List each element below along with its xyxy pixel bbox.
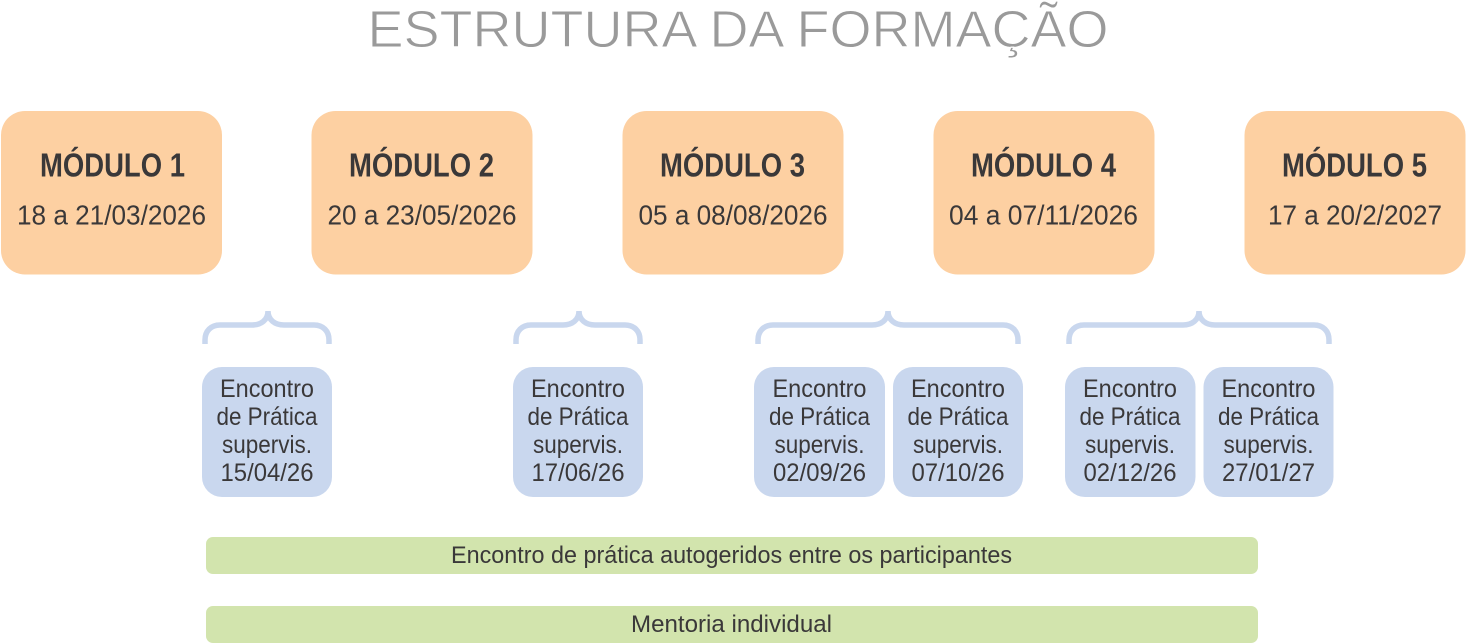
panel: encontro 02/12/26: supervis. <box>1085 431 1175 459</box>
panel: encontro 27/01/27: Encontro <box>1222 375 1316 403</box>
panel: módulo 3 <box>622 111 844 274</box>
panel: módulo 2: 20 a 23/05/2026 <box>328 200 516 230</box>
panel: módulo 5: MÓDULO 5 <box>1282 146 1427 184</box>
panel: encontro 02/12/26: 02/12/26 <box>1084 459 1176 487</box>
brace: after módulo 4 <box>1069 311 1329 344</box>
panel: encontro 27/01/27: supervis. <box>1224 431 1314 459</box>
panel: encontro 15/04/26: supervis. <box>222 431 312 459</box>
panel: módulo 4 <box>934 111 1154 274</box>
brace: after módulo 3 <box>758 311 1018 344</box>
panel: módulo 5 <box>1244 111 1466 274</box>
panel: encontro 27/01/27: 27/01/27 <box>1222 459 1315 487</box>
panel: módulo 1 <box>1 111 222 274</box>
bar: mentoria individual <box>206 606 1258 643</box>
panel: módulo 1: 18 a 21/03/2026 <box>17 200 206 230</box>
panel: encontro 27/01/27 <box>1204 367 1334 497</box>
panel: módulo 2 <box>312 111 532 274</box>
panel: encontro 02/09/26 <box>754 367 885 497</box>
panel: encontro 02/12/26 <box>1065 367 1196 497</box>
panel: encontro 17/06/26 <box>513 367 643 497</box>
brace: after módulo 2 <box>516 311 640 344</box>
panel: módulo 4: MÓDULO 4 <box>971 146 1117 184</box>
panel: encontro 17/06/26: 17/06/26 <box>532 459 624 487</box>
panel: módulo 5: 17 a 20/2/2027 <box>1268 200 1442 230</box>
bar: mentoria individual: Mentoria individual <box>631 611 832 638</box>
panel: encontro 17/06/26: supervis. <box>533 431 623 459</box>
panel: encontro 17/06/26: Encontro <box>531 375 625 403</box>
panel: encontro 15/04/26: 15/04/26 <box>220 459 314 487</box>
panel: módulo 2: MÓDULO 2 <box>349 146 494 184</box>
panel: módulo 4: 04 a 07/11/2026 <box>949 200 1138 230</box>
panel: encontro 27/01/27: de Prática <box>1218 403 1319 431</box>
panel: encontro 07/10/26: supervis. <box>913 431 1003 459</box>
bar: encontros autogeridos <box>206 537 1258 574</box>
panel: encontro 02/12/26: Encontro <box>1083 375 1177 403</box>
panel: encontro 15/04/26: Encontro <box>220 375 314 403</box>
brace: after módulo 1 <box>205 311 329 344</box>
panel: encontro 07/10/26: de Prática <box>908 403 1009 431</box>
panel: encontro 15/04/26 <box>202 367 332 497</box>
panel: módulo 3: MÓDULO 3 <box>660 146 805 184</box>
panel: encontro 15/04/26: de Prática <box>216 403 318 431</box>
panel: encontro 17/06/26: de Prática <box>528 403 629 431</box>
panel: encontro 02/09/26: de Prática <box>769 403 870 431</box>
panel: encontro 07/10/26: Encontro <box>911 375 1005 403</box>
panel: encontro 07/10/26 <box>893 367 1023 497</box>
panel: módulo 1: MÓDULO 1 <box>40 146 185 184</box>
bar: encontros autogeridos: Encontro de prática autogeridos entre os participantes <box>451 542 1012 569</box>
panel: encontro 02/12/26: de Prática <box>1080 403 1181 431</box>
panel: encontro 02/09/26: Encontro <box>772 375 866 403</box>
panel: encontro 07/10/26: 07/10/26 <box>912 459 1004 487</box>
panel: módulo 3: 05 a 08/08/2026 <box>638 200 828 230</box>
panel: encontro 02/09/26: supervis. <box>774 431 864 459</box>
panel: encontro 02/09/26: 02/09/26 <box>773 459 866 487</box>
title: ESTRUTURA DA FORMAÇÃO <box>368 1 1108 59</box>
